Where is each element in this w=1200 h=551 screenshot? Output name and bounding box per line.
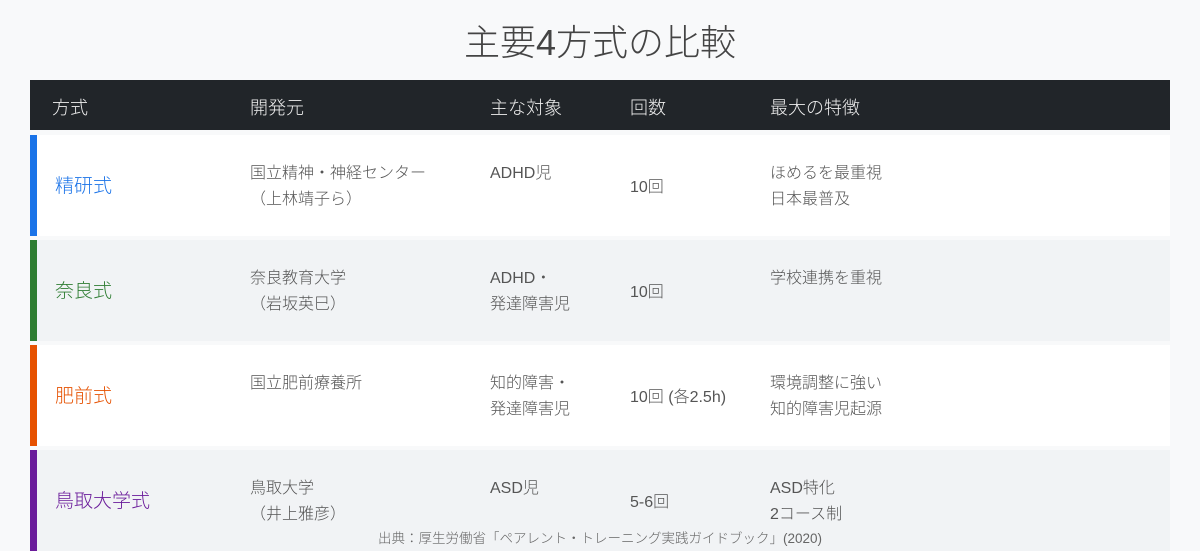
row: 奈良式: （岩坂英巳） xyxy=(250,296,346,313)
row: 肥前式: 10回 (各2.5h) xyxy=(630,389,726,406)
row: 精研式 xyxy=(30,135,1170,236)
row: 精研式: ほめるを最重視 xyxy=(770,165,882,182)
title: 主要4方式の比較 xyxy=(464,22,736,63)
row: 奈良式: 学校連携を重視 xyxy=(770,270,882,287)
row: 奈良式: ADHD・ xyxy=(490,270,551,287)
row: 奈良式: 奈良式 xyxy=(55,281,112,302)
row: 奈良式: 10回 xyxy=(630,284,664,301)
row: 鳥取大学式: 5-6回 xyxy=(630,494,669,511)
row: 肥前式: 発達障害児 xyxy=(490,401,570,418)
row: 肥前式 xyxy=(30,345,1170,446)
row: 精研式: 精研式 xyxy=(55,176,112,197)
row: 鳥取大学式: 鳥取大学 xyxy=(250,480,314,497)
row: 精研式: （上林靖子ら） xyxy=(250,191,362,208)
row: 奈良式: 奈良教育大学 xyxy=(250,270,346,287)
row: 鳥取大学式: ASD児 xyxy=(490,480,539,497)
table header: 回数 xyxy=(630,98,666,118)
row: 肥前式: 国立肥前療養所 xyxy=(250,375,362,392)
row: 鳥取大学式 xyxy=(30,450,1170,551)
table header: 開発元 xyxy=(250,98,304,118)
table header: 方式 xyxy=(52,98,88,118)
row: 肥前式: 知的障害・ xyxy=(490,375,570,392)
row: 肥前式: 環境調整に強い xyxy=(770,375,882,392)
row: 奈良式: 発達障害児 xyxy=(490,296,570,313)
row: 鳥取大学式: ASD特化 xyxy=(770,480,835,497)
row: 奈良式 xyxy=(30,240,1170,341)
row: 精研式: 10回 xyxy=(630,179,664,196)
row: 精研式: 国立精神・神経センター xyxy=(250,165,426,182)
row: 精研式: ADHD児 xyxy=(490,165,551,182)
source note: 出典：厚生労働省「ペアレント・トレーニング実践ガイドブック」(2020) xyxy=(378,531,822,546)
row: 鳥取大学式: 2コース制 xyxy=(770,506,842,523)
row: 鳥取大学式: （井上雅彦） xyxy=(250,506,346,523)
row: 肥前式: 知的障害児起源 xyxy=(770,401,882,418)
table header: 主な対象 xyxy=(490,98,562,118)
table header: 最大の特徴 xyxy=(770,98,860,118)
row: 肥前式: 肥前式 xyxy=(55,386,112,407)
table header xyxy=(30,80,1170,130)
row: 鳥取大学式: 鳥取大学式 xyxy=(55,491,150,512)
row: 精研式: 日本最普及 xyxy=(770,191,850,208)
